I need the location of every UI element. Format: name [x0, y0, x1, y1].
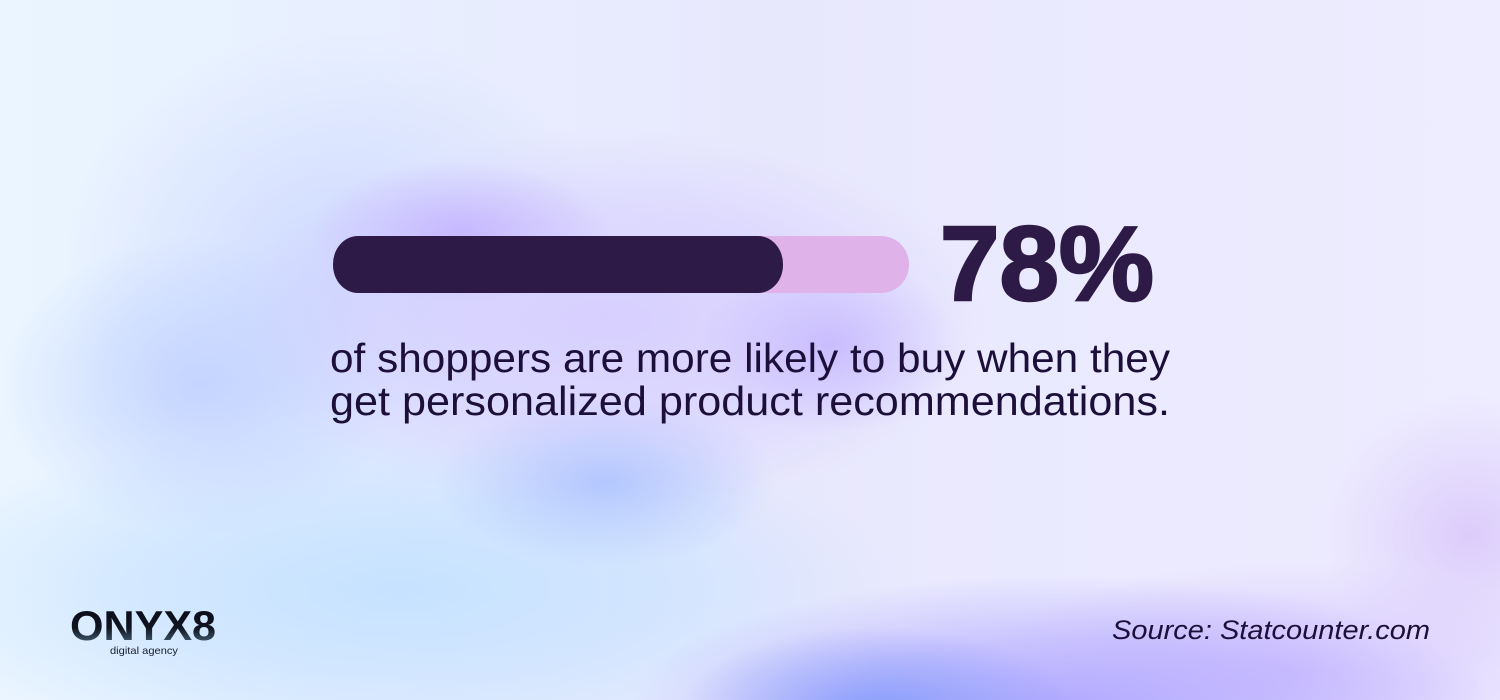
- statistic: 78%: 78%: [940, 205, 1154, 323]
- description text: of shoppers are more likely to buy when they: [330, 335, 1171, 381]
- description text: [330, 335, 1171, 424]
- description text: get personalized product recommendations.: [330, 378, 1170, 424]
- logo: ONYX8 digital agency: digital agency: [110, 645, 179, 657]
- progress bar: [333, 236, 909, 293]
- progress bar fill: [333, 236, 783, 293]
- progress bar track: [340, 236, 909, 293]
- logo: ONYX8 digital agency: ONYX8: [70, 602, 216, 649]
- source citation: Source: Statcounter.com: [1112, 615, 1430, 645]
